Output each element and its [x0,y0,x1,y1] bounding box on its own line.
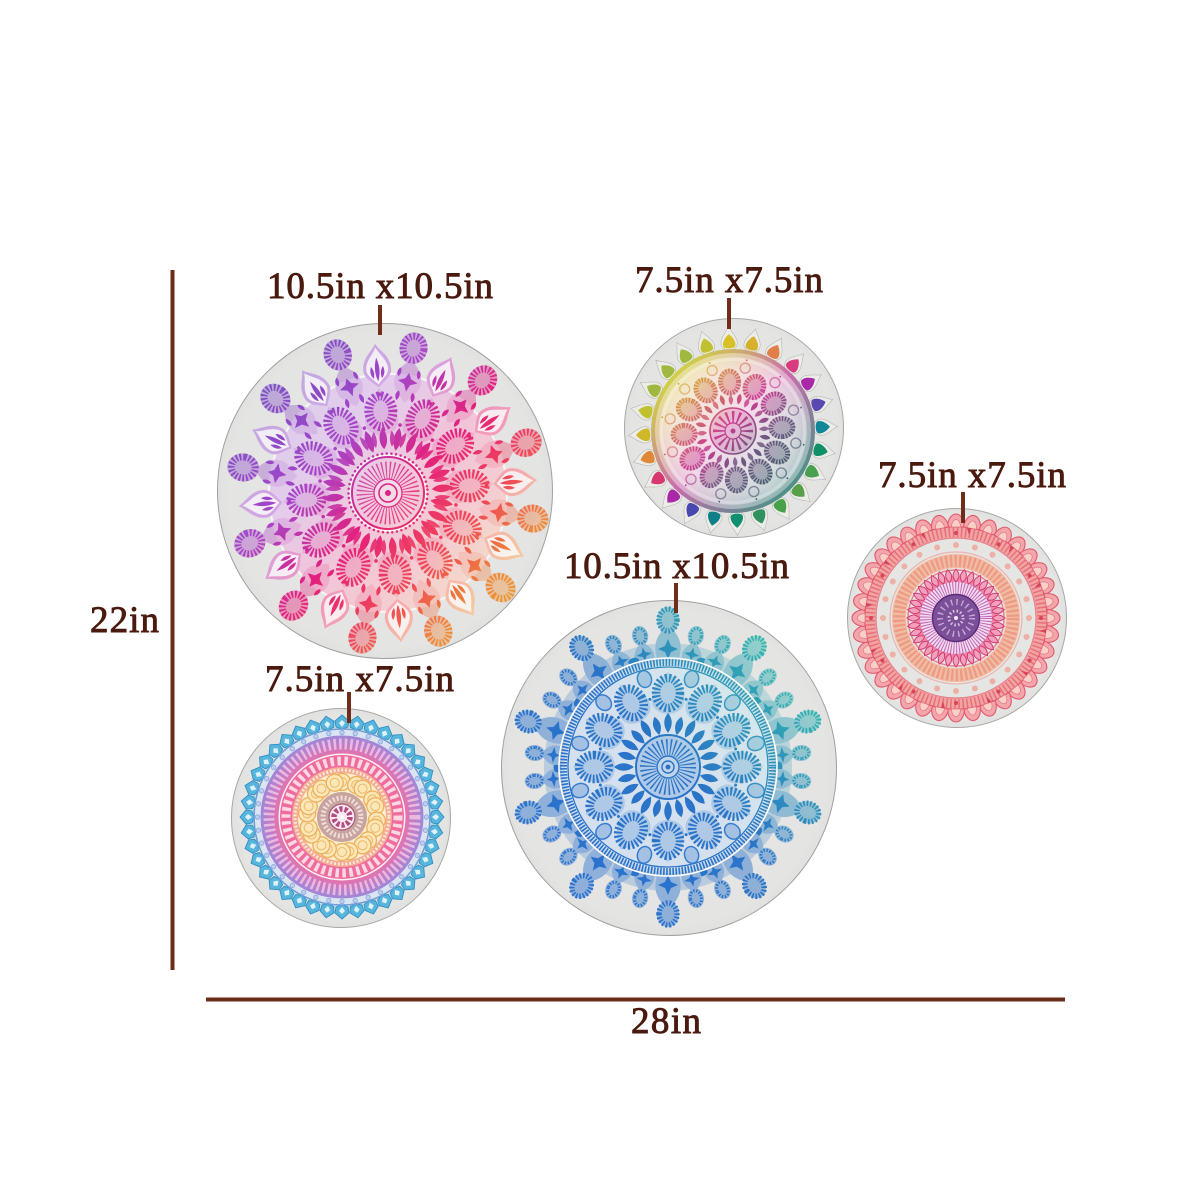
tick: rainbow plate [727,298,731,329]
inner disc [653,351,813,511]
size label: large purple plate: 10.5in x10.5in [267,266,493,307]
plate: rainbow mandala [624,318,844,540]
mandala underlay [268,373,508,613]
plate: blue-teal mandala [501,600,837,936]
ring highlight [559,658,777,876]
inner mandala [661,359,804,503]
mandala ornament [514,606,822,928]
mandala ornament [217,323,553,659]
height label: 22in [90,600,159,641]
size label: red plate: 7.5in x7.5in [878,455,1066,496]
width label: 28in [631,1001,701,1042]
plate disc [502,600,836,936]
inner glow [659,357,807,505]
tick: large purple plate [378,305,382,335]
plate disc [218,324,552,658]
plate disc [624,318,844,538]
inner rim shading [657,355,809,507]
plate disc [848,508,1066,728]
plate disc [232,708,450,928]
concentric bands [844,506,1068,730]
tick: blue-pink plate [347,692,351,723]
size label: large blue plate: 10.5in x10.5in [564,546,789,587]
spear underlay [225,330,551,656]
rainbow drops [624,322,842,540]
concentric bands [229,704,455,930]
height dimension line [170,270,174,970]
size label: rainbow plate: 7.5in x7.5in [635,260,823,301]
plate: purple-orange mandala [217,323,553,659]
mandala underlay [562,661,774,873]
tick: large blue plate [674,583,678,613]
size label: blue-pink plate: 7.5in x7.5in [265,659,454,700]
width dimension line [206,998,1065,1002]
plate: blue-pink concentric mandala [229,704,455,930]
tick: red plate [961,492,965,523]
plate: red-purple concentric mandala [844,506,1068,730]
